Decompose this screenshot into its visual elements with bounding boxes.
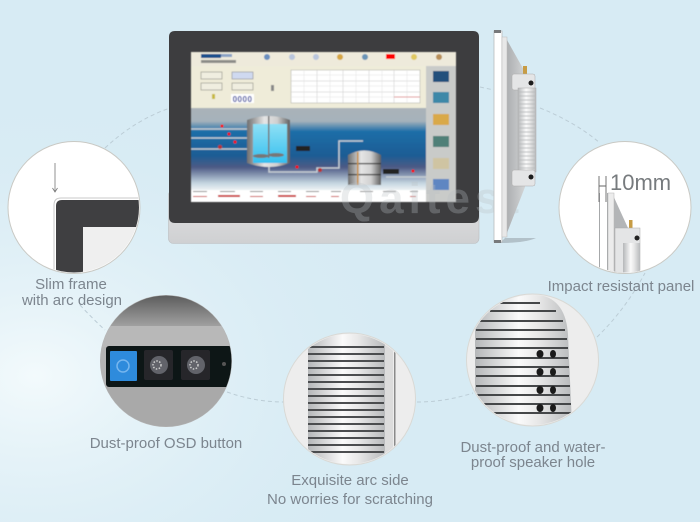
process diagram	[191, 108, 426, 202]
caption: speaker hole: Dust-proof and water-	[460, 439, 606, 456]
screen control panel: 0000	[233, 95, 252, 104]
silver lower frame	[168, 190, 479, 244]
screen side menu	[426, 66, 456, 202]
panel: OSD button	[100, 295, 232, 427]
reactor vessel	[247, 116, 290, 167]
screen header bar	[191, 52, 456, 66]
panel: 10mm impact panel	[559, 142, 691, 278]
caption: impact panel: Impact resistant panel	[548, 278, 694, 295]
10mm label: 10mm	[610, 170, 671, 195]
icon: down arrow	[52, 163, 58, 192]
screen	[191, 52, 456, 202]
screen data row	[193, 191, 418, 197]
storage tank	[348, 150, 381, 185]
caption: OSD button: Dust-proof OSD button	[90, 435, 242, 452]
caption: speaker hole: proof speaker hole	[471, 454, 595, 471]
dark bezel	[169, 31, 479, 223]
caption: arc side: No worries for scratching	[267, 491, 433, 508]
monitor side view	[494, 30, 536, 243]
panel: slim frame	[8, 141, 140, 274]
panel: arc side	[284, 332, 416, 466]
trend chart	[271, 70, 420, 103]
dashed connector ring	[80, 87, 645, 402]
screen control panel	[191, 66, 426, 108]
caption: arc side: Exquisite arc side	[291, 472, 409, 489]
panel: speaker hole	[466, 294, 598, 426]
caption: slim frame: Slim frame	[35, 276, 107, 293]
monitor front view	[168, 31, 524, 244]
watermark: Qaitest	[340, 174, 524, 223]
caption: slim frame: with arc design	[21, 292, 122, 309]
